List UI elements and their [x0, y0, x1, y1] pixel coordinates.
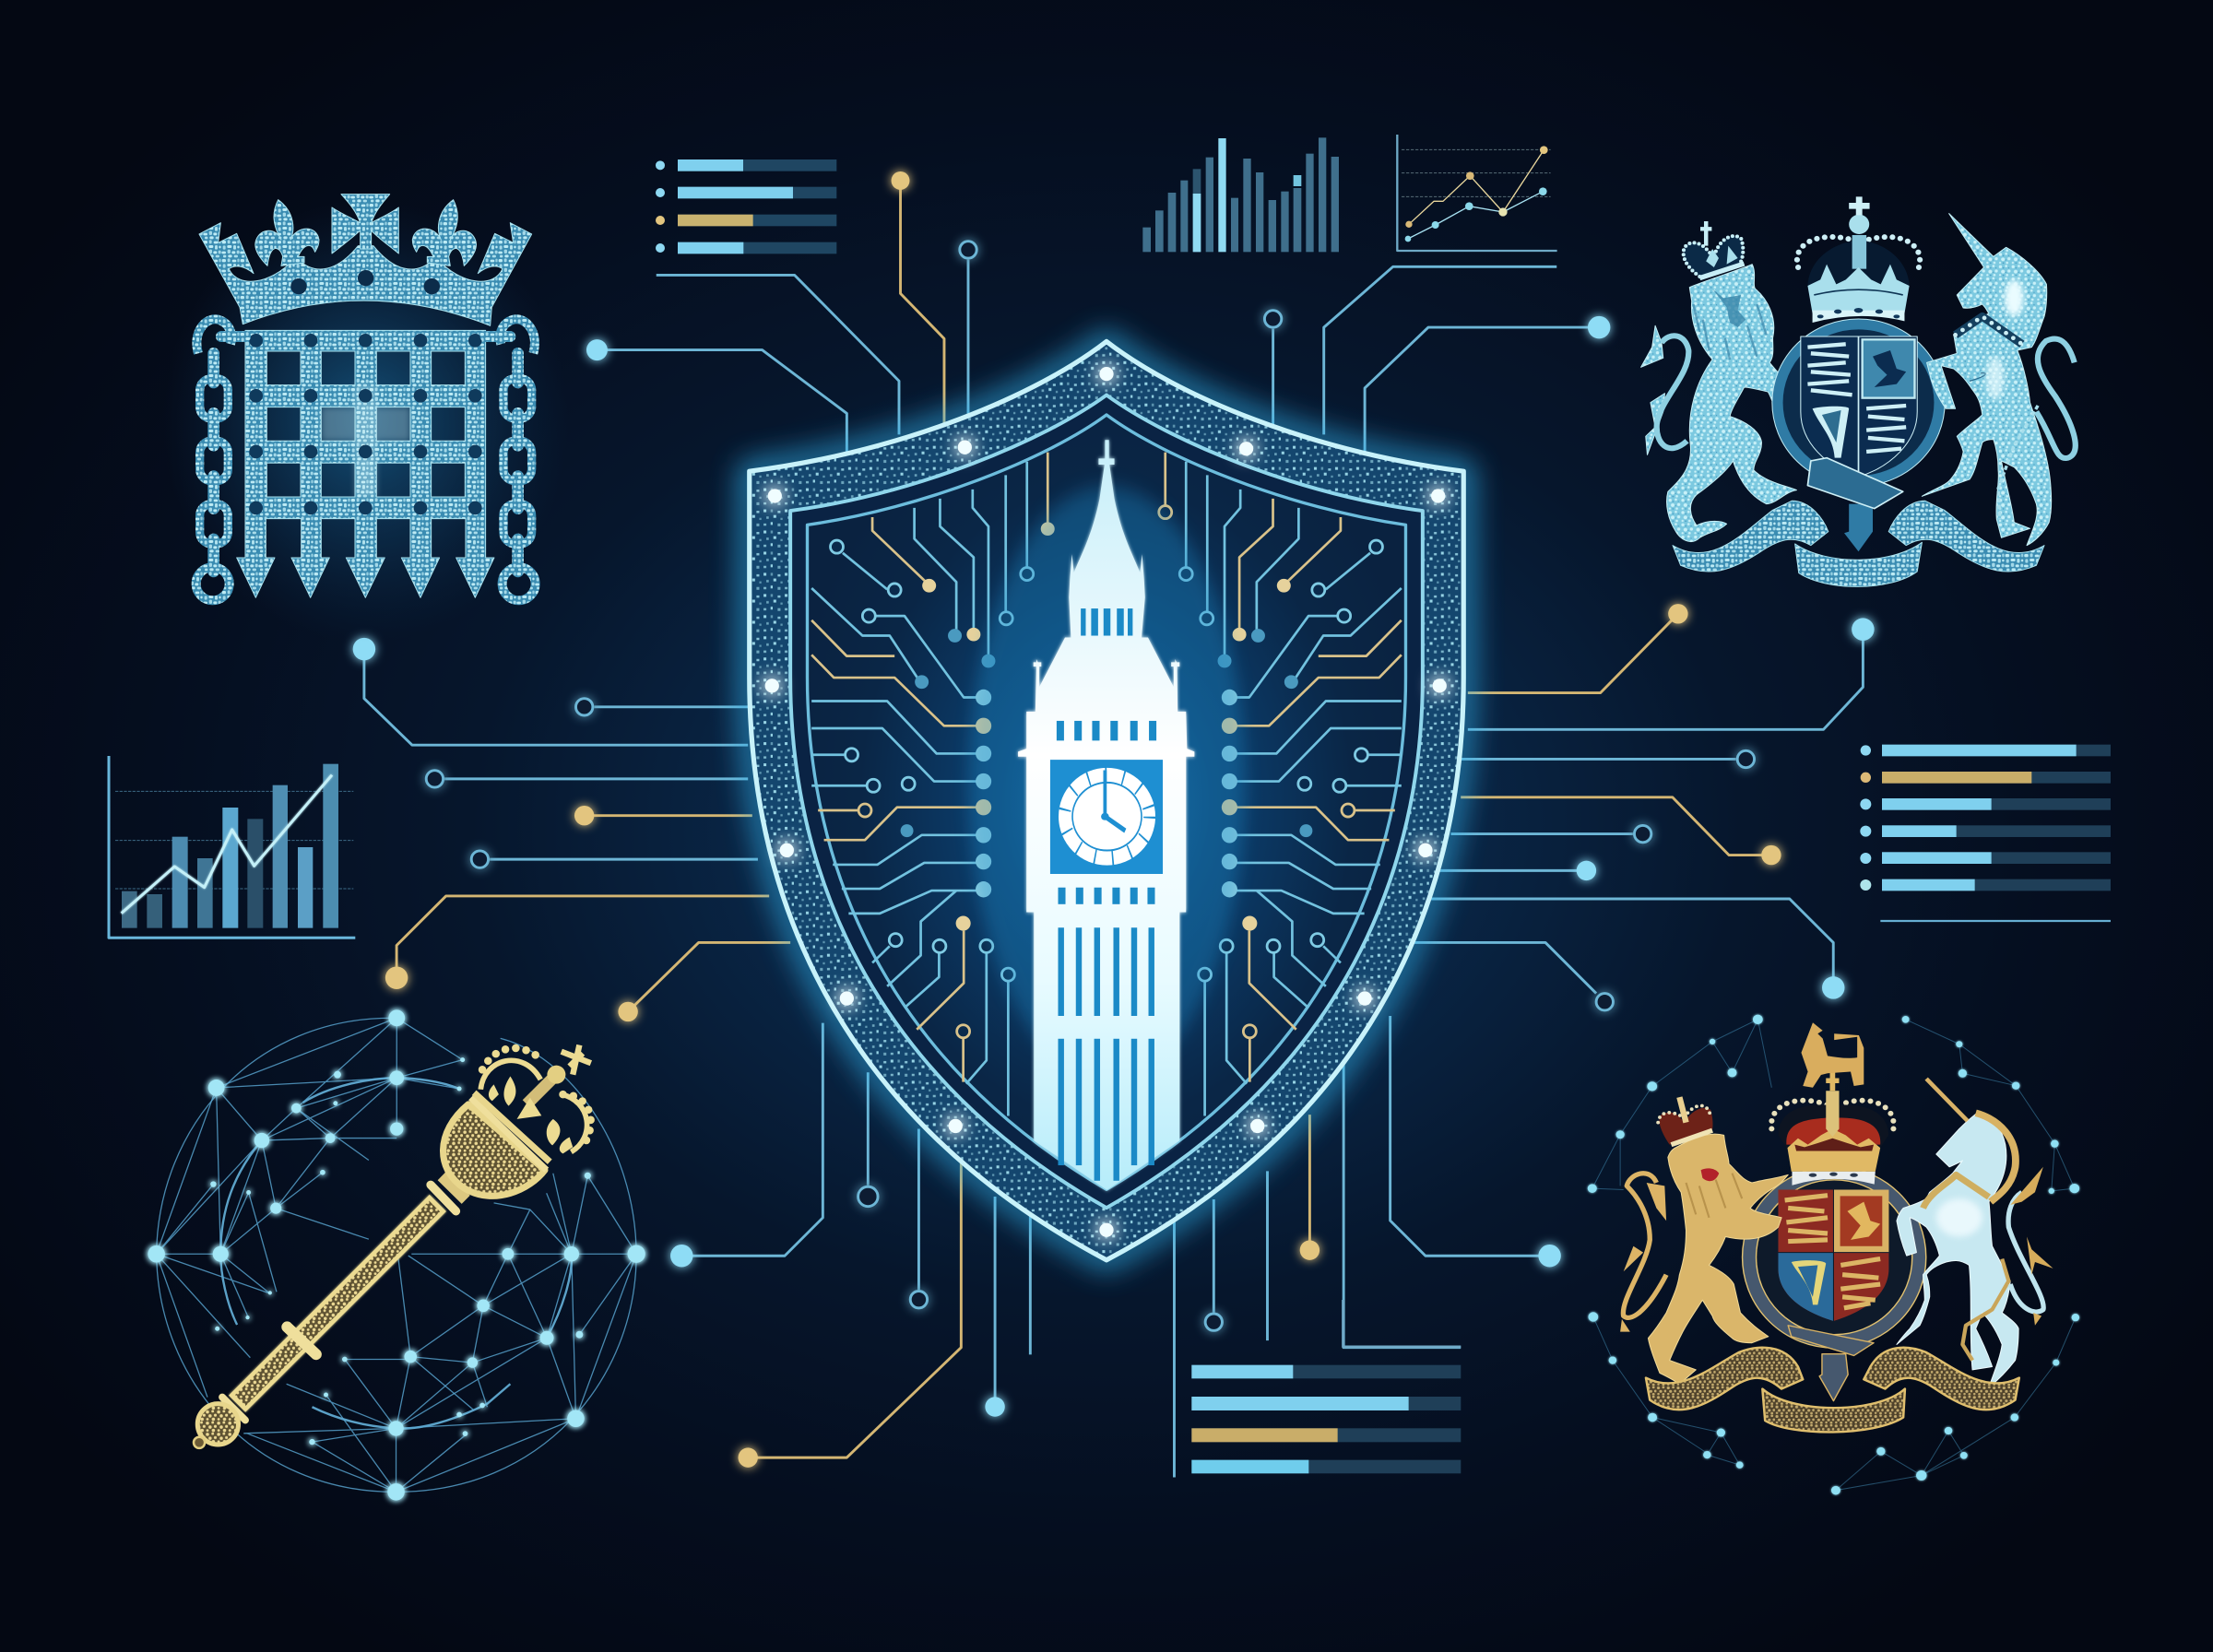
chart: top-centre column bars: [1142, 137, 1339, 252]
connector end nodes: [353, 171, 1875, 1468]
icon: portcullis with crown: [163, 195, 569, 643]
belfry and louvre slots: [1057, 608, 1156, 1181]
globe lines: [157, 1018, 636, 1492]
unicorn supporter: [1922, 214, 2052, 546]
white unicorn supporter: [1897, 1079, 2053, 1387]
lion supporter: [1641, 265, 1799, 542]
panel: central shield: [750, 341, 1463, 1260]
icon: full colour royal coat of arms: [1620, 1022, 2053, 1432]
shield inner circuitry left: [811, 453, 1055, 1115]
icon: Big Ben clock tower: [969, 440, 1246, 1190]
globe nodes: [148, 1009, 645, 1501]
chart: bottom progress bars: [1191, 1300, 1461, 1473]
network ring behind golden arms: [1588, 1015, 2079, 1494]
shield band glowing nodes: [765, 367, 1447, 1237]
shield dotted band: [750, 341, 1463, 1260]
shield inner rim: [790, 395, 1423, 1208]
sword and scrolls: [1646, 1326, 2019, 1432]
icon: golden mace: [194, 1045, 591, 1448]
garter and shield: [1749, 1174, 1919, 1341]
shield outer glow: [750, 341, 1463, 1260]
gold lion supporter: [1620, 1097, 1788, 1384]
icon: blue royal coat of arms: [1641, 196, 2076, 586]
outer circuit traces: [364, 181, 1863, 1478]
chart: top-right line chart: [1397, 135, 1557, 251]
central crown: [1797, 196, 1920, 323]
shield inner circuitry right: [1159, 453, 1402, 1115]
chart: top-left progress bars: [656, 159, 836, 254]
chart: left bars with trend line: [109, 756, 355, 938]
chart: right progress bars: [1860, 745, 2111, 921]
network globe behind mace: [148, 1009, 645, 1501]
sword and motto ribbon: [1673, 458, 2044, 586]
shield inner field: [808, 415, 1405, 1189]
crest lion: [1801, 1022, 1864, 1088]
crest crown: [1771, 1072, 1894, 1186]
shield and garter: [1772, 319, 1945, 486]
clock face: [1050, 760, 1163, 874]
